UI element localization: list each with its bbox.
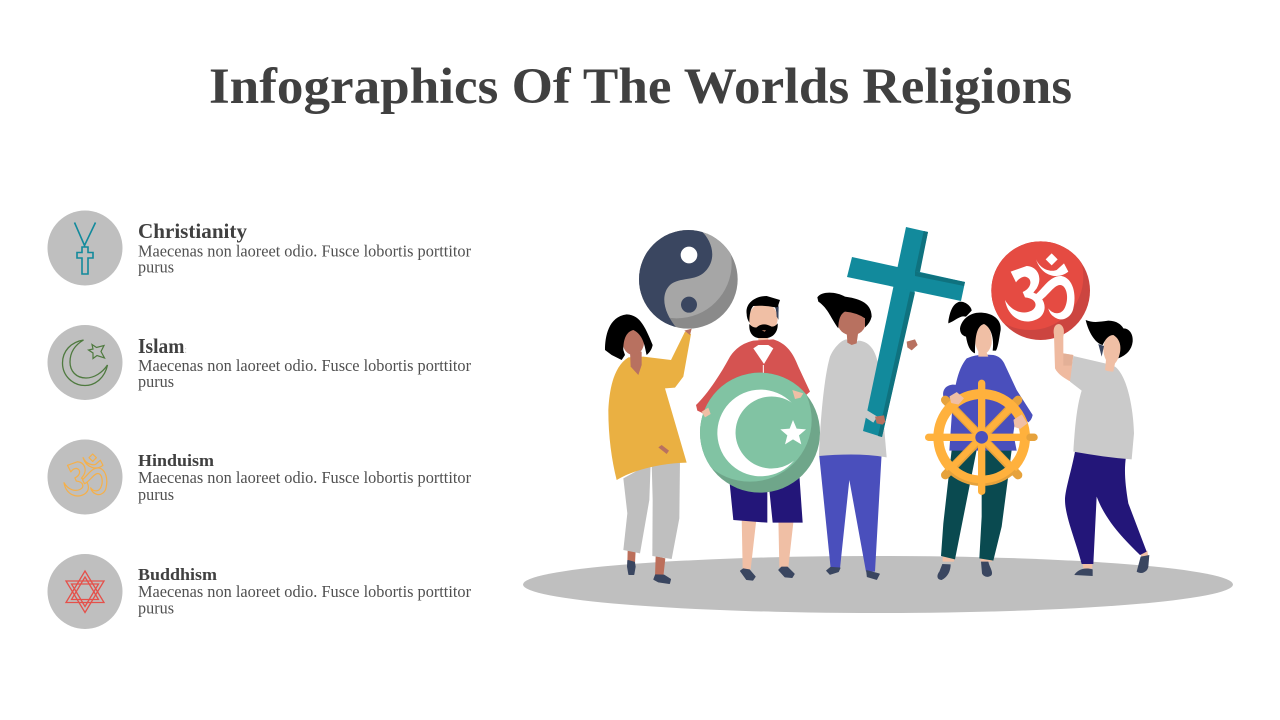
heading: Christianity: Christianity xyxy=(138,219,247,243)
illustration: people holding religious symbols xyxy=(523,208,1233,613)
item: Hinduism xyxy=(48,440,471,514)
symbol: yin-yang ball xyxy=(639,230,738,329)
icon: six-pointed star xyxy=(48,554,122,629)
symbol: om ball xyxy=(991,241,1090,340)
heading: Buddhism: Buddhism xyxy=(138,565,217,584)
heading: Islam: Islam: xyxy=(138,334,187,358)
person: yellow shirt with yin-yang xyxy=(605,208,738,583)
icon: om outline xyxy=(48,440,122,514)
text: Christianity description: Maecenas non laoreet odio. Fusce lobortis porttitor xyxy=(138,242,471,260)
infographic canvas xyxy=(48,67,1233,629)
ground ellipse xyxy=(523,556,1233,613)
panel: religion list xyxy=(48,210,471,629)
text: Islam description: Maecenas non laoreet odio. Fusce lobortis porttitor xyxy=(138,356,471,375)
person: purple shirt with dharma wheel xyxy=(929,302,1034,580)
symbol: teal cross xyxy=(847,227,965,437)
person: red jacket with crescent xyxy=(688,296,820,580)
text: Christianity description: purus xyxy=(138,258,174,276)
text: Hinduism description: Maecenas non laoreet odio. Fusce lobortis porttitor xyxy=(138,468,471,487)
title: Infographics Of The Worlds Religions xyxy=(209,59,1072,115)
item: Christianity xyxy=(48,210,471,286)
icon: crescent and star xyxy=(48,325,122,400)
text: Buddhism description: Maecenas non laoreet odio. Fusce lobortis porttitor xyxy=(138,582,471,601)
icon: cross necklace xyxy=(48,210,122,286)
text: Hinduism description: purus xyxy=(138,485,174,504)
symbol: dharma wheel xyxy=(929,383,1034,491)
symbol: crescent and star ball xyxy=(700,372,820,493)
item: Islam xyxy=(48,325,471,400)
item: Buddhism xyxy=(48,554,471,629)
person: grey shirt with om ball xyxy=(991,241,1150,576)
text: Islam description: purus xyxy=(138,372,174,391)
heading: Hinduism: Hinduism xyxy=(138,451,214,470)
person: grey shirt with cross xyxy=(817,227,965,579)
text: Buddhism description: purus xyxy=(138,598,174,618)
